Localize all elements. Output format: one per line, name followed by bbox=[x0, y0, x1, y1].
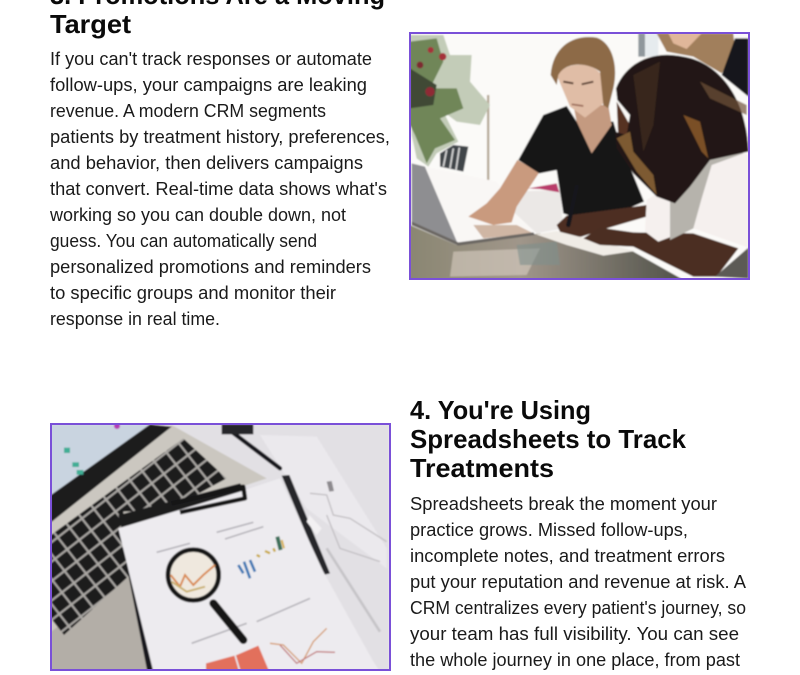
white cloth and pink bbox=[513, 190, 563, 233]
laptop bbox=[412, 163, 458, 245]
laptop body bbox=[52, 425, 266, 632]
body text: section 3: personalized promotions and reminders bbox=[50, 257, 371, 277]
heading: section 4: Treatments bbox=[410, 453, 554, 483]
body text: section 4: your team has full visibility. You can see bbox=[410, 624, 739, 644]
third person bbox=[657, 33, 735, 73]
heading: section 4: Spreadsheets to Track bbox=[410, 424, 687, 454]
notebook bbox=[536, 231, 635, 256]
clipboard bbox=[282, 475, 330, 575]
body text: section 3: that convert. Real-time data shows what's bbox=[50, 179, 387, 199]
body text: section 4 bbox=[410, 494, 746, 670]
chart text lines bbox=[157, 522, 310, 643]
body text: section 4: incomplete notes, and treatment errors bbox=[410, 546, 725, 566]
table bbox=[410, 225, 687, 282]
keyboard bbox=[51, 438, 227, 635]
line chart bbox=[270, 628, 327, 663]
photo: clipboard with charts and magnifier bbox=[51, 423, 390, 672]
heading: section 3 bbox=[50, 0, 385, 39]
body text: section 3: follow-ups, your campaigns are leaking bbox=[50, 75, 367, 95]
heading: section 4 bbox=[410, 395, 687, 483]
writing hand bbox=[557, 205, 647, 238]
body text: section 3: If you can't track responses or automate bbox=[50, 49, 372, 69]
woman face and hair bbox=[616, 102, 630, 136]
magnifier bbox=[213, 603, 243, 640]
body text: section 4: CRM centralizes every patient's journey, so bbox=[410, 598, 746, 618]
section 4: spreadsheets bbox=[410, 395, 746, 670]
bar chart bbox=[238, 560, 255, 578]
woman shirt bbox=[645, 149, 748, 248]
body text: section 4: Spreadsheets break the moment your bbox=[410, 494, 717, 514]
body text: section 3: to specific groups and monitor their bbox=[50, 283, 336, 303]
paper bbox=[118, 478, 380, 672]
heading: section 3: Target bbox=[50, 9, 131, 39]
body text: section 3: revenue. A modern CRM segments bbox=[50, 101, 326, 121]
body text: section 3: response in real time. bbox=[50, 309, 220, 329]
body text: section 4: put your reputation and revenue at risk. A bbox=[410, 572, 746, 592]
plant bbox=[410, 35, 490, 167]
body text: section 3: patients by treatment history, preferences, bbox=[50, 127, 390, 147]
body text: section 3 bbox=[49, 49, 390, 329]
body text: section 4: the whole journey in one place, from past bbox=[410, 650, 740, 670]
chair bbox=[440, 145, 468, 172]
heading: section 4: 4. You're Using bbox=[410, 395, 591, 425]
man bbox=[468, 160, 539, 225]
body text: section 4: practice grows. Missed follow-ups, bbox=[410, 520, 688, 540]
photo: team working at a laptop bbox=[410, 33, 749, 282]
pen bbox=[231, 433, 283, 472]
orange bars bbox=[206, 646, 269, 672]
screen and bezel bbox=[51, 424, 150, 497]
body text: section 3: working so you can double down, not bbox=[49, 205, 346, 225]
section 3: promotions bbox=[49, 0, 390, 329]
body text: section 3: and behavior, then delivers campaigns bbox=[50, 153, 363, 173]
body text: section 3: guess. You can automatically send bbox=[50, 231, 317, 251]
